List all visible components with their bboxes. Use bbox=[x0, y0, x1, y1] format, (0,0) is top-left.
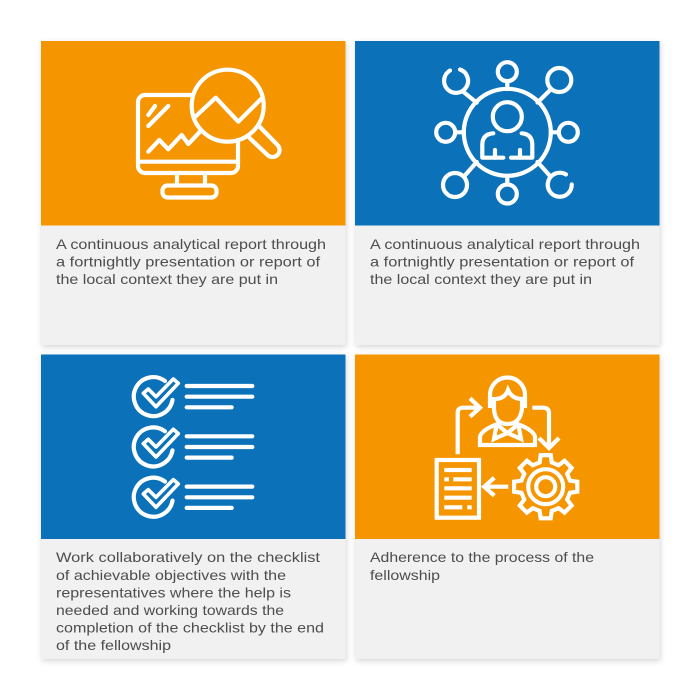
text: checklist description: representatives where the help is bbox=[56, 584, 291, 600]
text: analytical report description bbox=[56, 236, 326, 287]
icon: document bbox=[437, 460, 479, 518]
text: process description: Adherence to the process of the bbox=[370, 549, 594, 565]
text: network description: a fortnightly presentation or report of bbox=[370, 254, 634, 270]
panel: network report bbox=[355, 41, 660, 345]
text: process description bbox=[370, 549, 594, 583]
text: network description bbox=[370, 236, 640, 287]
icon: person network bbox=[436, 62, 578, 204]
arrow: gear to document bbox=[484, 478, 508, 496]
text: analytical report description: A continuous analytical report through bbox=[56, 236, 326, 252]
panel: process bbox=[355, 354, 660, 659]
text: network description: the local context they are put in bbox=[370, 271, 592, 287]
text: analytical report description: a fortnightly presentation or report of bbox=[56, 254, 320, 270]
icon: person bbox=[480, 378, 535, 445]
text: checklist description: completion of the checklist by the end bbox=[56, 620, 324, 636]
arrow: document to person bbox=[458, 398, 480, 454]
icon: checklist bbox=[134, 377, 252, 517]
panel: checklist bbox=[41, 354, 346, 659]
text: checklist description: needed and working towards the bbox=[56, 602, 284, 618]
text: analytical report description: the local context they are put in bbox=[56, 271, 278, 287]
text: checklist description: of the fellowship bbox=[56, 637, 171, 653]
text: checklist description: Work collaboratively on the checklist bbox=[56, 549, 320, 565]
text: checklist description bbox=[56, 549, 324, 653]
icon: process cycle bbox=[437, 378, 577, 518]
icon: gear bbox=[514, 455, 577, 518]
text: process description: fellowship bbox=[370, 567, 440, 583]
arrow: person to gear bbox=[532, 408, 559, 448]
panel: analytical report bbox=[41, 41, 346, 345]
text: network description: A continuous analytical report through bbox=[370, 236, 640, 252]
text: checklist description: of achievable objectives with the bbox=[56, 567, 286, 583]
icon: monitor with magnifier bbox=[138, 70, 280, 198]
